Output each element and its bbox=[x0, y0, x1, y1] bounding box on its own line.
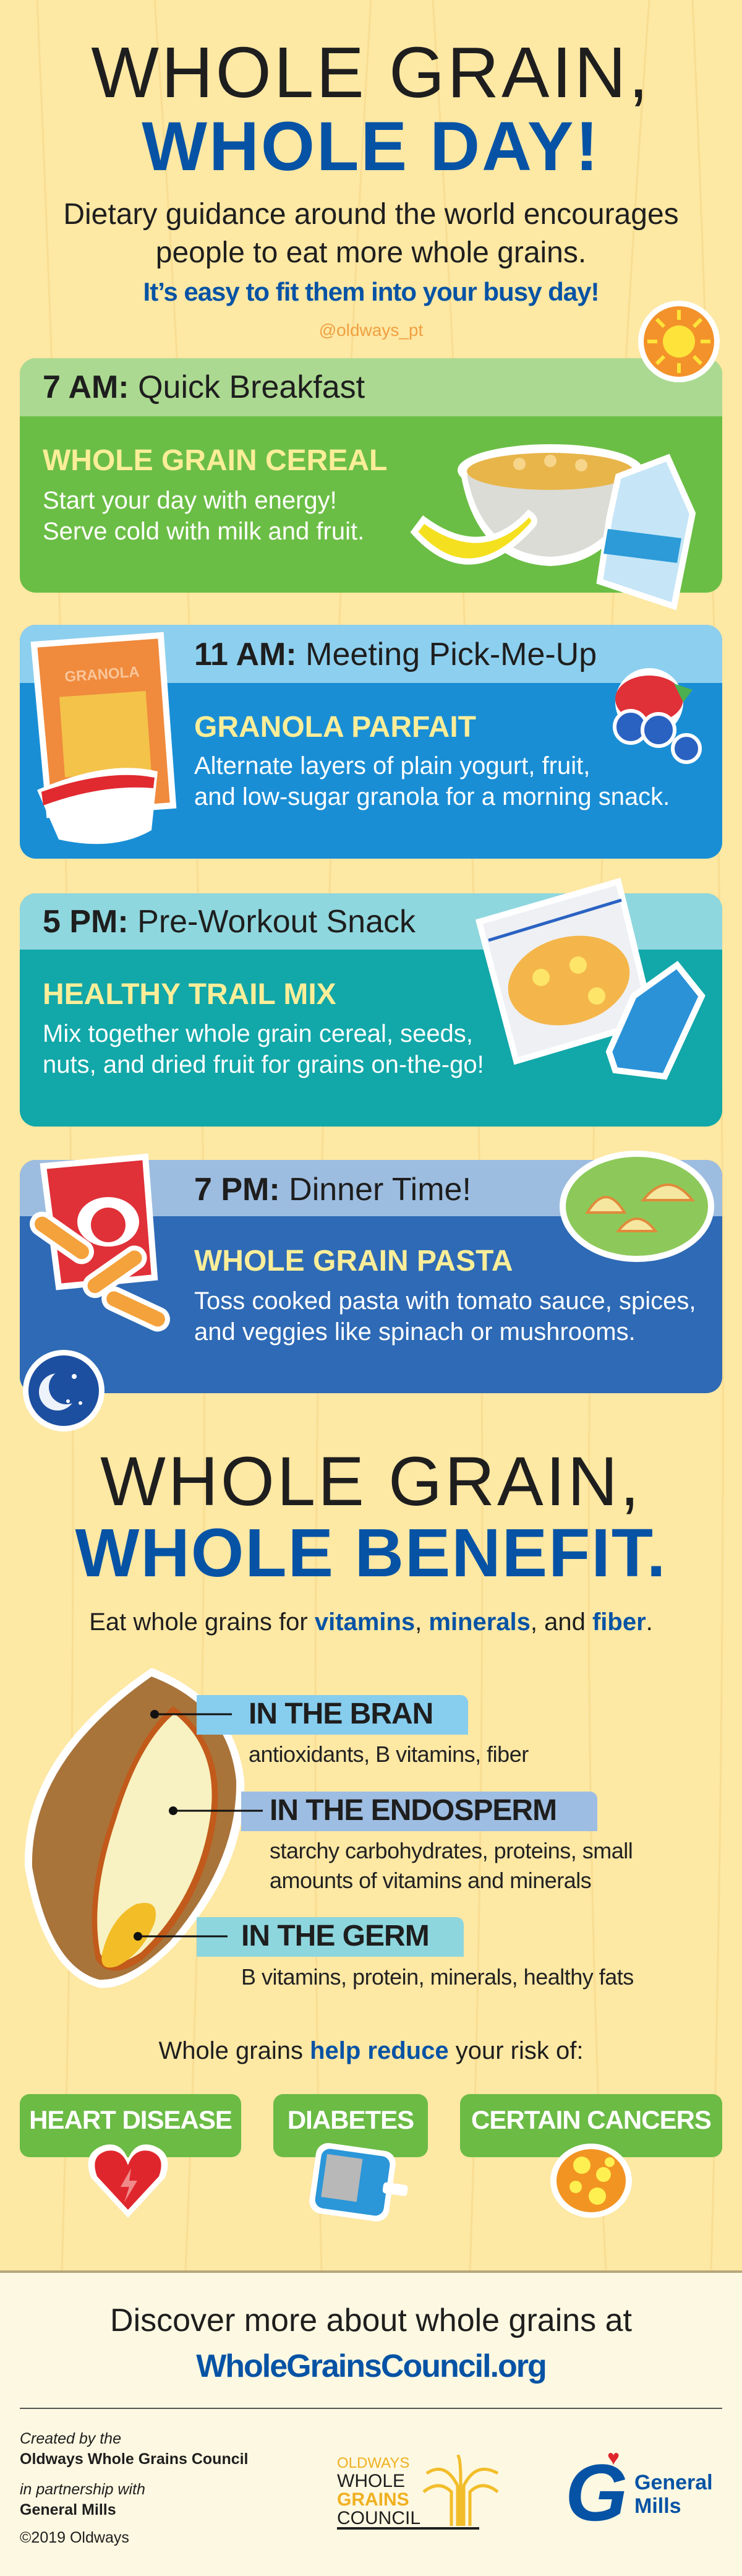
intro text: people to eat more whole grains. bbox=[156, 236, 586, 269]
intro highlight: It’s easy to fit them into your busy day! bbox=[143, 277, 599, 306]
icon: spinach and mushrooms bbox=[560, 1151, 714, 1262]
heading line 2: WHOLE BENEFIT. bbox=[75, 1515, 667, 1591]
logo: oldways whole grains council bbox=[337, 2455, 498, 2530]
handle: @oldways_pt bbox=[319, 320, 423, 340]
panel: 7 AM bbox=[20, 358, 722, 593]
header text: 7 PM: Dinner Time! bbox=[194, 1172, 471, 1208]
risk intro: Whole grains help reduce your risk of: bbox=[159, 2037, 583, 2064]
description: nuts, and dried fruit for grains on-the-go! bbox=[43, 1051, 484, 1078]
item title: HEALTHY TRAIL MIX bbox=[43, 978, 336, 1011]
credits: Oldways Whole Grains Council bbox=[20, 2450, 249, 2468]
description: Mix together whole grain cereal, seeds, bbox=[43, 1020, 473, 1047]
description bbox=[43, 1020, 484, 1078]
intro text bbox=[63, 198, 679, 269]
logo: general mills: Mills bbox=[634, 2494, 681, 2518]
header text: 11 AM: Meeting Pick-Me-Up bbox=[194, 637, 597, 672]
item title: GRANOLA PARFAIT bbox=[194, 711, 476, 744]
header text: 5 PM: Pre-Workout Snack bbox=[43, 904, 416, 940]
icon: glucose meter bbox=[309, 2143, 408, 2222]
icon: moon bbox=[23, 1350, 104, 1432]
discover text: Discover more about whole grains at bbox=[110, 2303, 632, 2338]
footer area bbox=[0, 2270, 742, 2576]
label: bran: IN THE BRAN bbox=[249, 1698, 433, 1730]
title line 2: WHOLE DAY! bbox=[142, 108, 600, 185]
title: WHOLE GRAIN, bbox=[91, 32, 651, 113]
icon: sun bbox=[638, 301, 720, 382]
text: endosperm nutrients bbox=[270, 1838, 633, 1893]
icon: trail mix bag and bottle bbox=[475, 877, 706, 1080]
description: and veggies like spinach or mushrooms. bbox=[194, 1318, 636, 1346]
icon: granola bag and yogurt: GRANOLA bbox=[64, 664, 140, 685]
description: Alternate layers of plain yogurt, fruit, bbox=[194, 752, 590, 779]
heading: whole benefit: WHOLE GRAIN, bbox=[100, 1443, 642, 1520]
box: heart disease bbox=[20, 2094, 241, 2157]
label: germ: IN THE GERM bbox=[241, 1920, 429, 1952]
logo: general mills: ♥ bbox=[607, 2446, 620, 2470]
icon: berries bbox=[613, 668, 702, 764]
credits: General Mills bbox=[20, 2501, 116, 2518]
label: endosperm: IN THE ENDOSPERM bbox=[270, 1794, 556, 1827]
label: endosperm bbox=[169, 1792, 597, 1831]
logo: general mills: General bbox=[634, 2471, 713, 2494]
description bbox=[43, 487, 364, 545]
panel: 7 PM bbox=[20, 1160, 722, 1393]
box: certain cancers: CERTAIN CANCERS bbox=[471, 2105, 711, 2134]
label: germ bbox=[134, 1917, 464, 1957]
text: germ nutrients: B vitamins, protein, minerals, healthy fats bbox=[241, 1964, 634, 1990]
intro text: Dietary guidance around the world encourages bbox=[63, 198, 679, 231]
icon: heart bbox=[88, 2144, 168, 2218]
logo: oldways whole grains council: COUNCIL bbox=[337, 2508, 420, 2528]
box: heart disease: HEART DISEASE bbox=[29, 2105, 232, 2134]
header text: 7 AM: Quick Breakfast bbox=[43, 369, 365, 405]
item title: WHOLE GRAIN PASTA bbox=[194, 1245, 513, 1277]
text: endosperm nutrients: amounts of vitamins and minerals bbox=[270, 1868, 591, 1893]
label: bran bbox=[150, 1695, 468, 1735]
credits: Created by the bbox=[20, 2430, 121, 2447]
icon: granola bag and yogurt bbox=[31, 632, 177, 844]
box: diabetes: DIABETES bbox=[288, 2105, 414, 2134]
credits bbox=[20, 2430, 249, 2546]
box: certain cancers bbox=[460, 2094, 722, 2157]
box: diabetes bbox=[273, 2094, 428, 2157]
description: Toss cooked pasta with tomato sauce, spices, bbox=[194, 1287, 696, 1315]
panel: 11 AM bbox=[20, 625, 722, 859]
credits: in partnership with bbox=[20, 2481, 145, 2498]
icon: cancer cell bbox=[550, 2144, 632, 2218]
text: endosperm nutrients: starchy carbohydrates, proteins, small bbox=[270, 1838, 633, 1863]
logo: oldways whole grains council: WHOLE bbox=[337, 2471, 405, 2491]
logo: oldways whole grains council: OLDWAYS bbox=[337, 2455, 409, 2471]
description: Start your day with energy! bbox=[43, 487, 337, 514]
panel: 5 PM bbox=[20, 893, 722, 1127]
logo: general mills: G bbox=[565, 2447, 628, 2538]
credits: ©2019 Oldways bbox=[20, 2529, 129, 2546]
icon: grain kernel diagram bbox=[25, 1668, 245, 1988]
icon: cereal bowl, banana, milk bbox=[411, 444, 696, 610]
logo: oldways whole grains council: GRAINS bbox=[337, 2489, 409, 2510]
description bbox=[194, 1287, 696, 1346]
url: WholeGrainsCouncil.org bbox=[196, 2348, 546, 2384]
item title: WHOLE GRAIN CEREAL bbox=[43, 444, 387, 477]
description: and low-sugar granola for a morning snack. bbox=[194, 783, 670, 810]
logo: general mills bbox=[565, 2446, 713, 2538]
description bbox=[194, 752, 670, 810]
description: Serve cold with milk and fruit. bbox=[43, 518, 364, 545]
text: bran nutrients: antioxidants, B vitamins, fiber bbox=[249, 1741, 529, 1767]
benefit intro: Eat whole grains for vitamins, minerals, and fiber. bbox=[89, 1608, 653, 1636]
icon: tomato can and pasta bbox=[30, 1153, 170, 1331]
